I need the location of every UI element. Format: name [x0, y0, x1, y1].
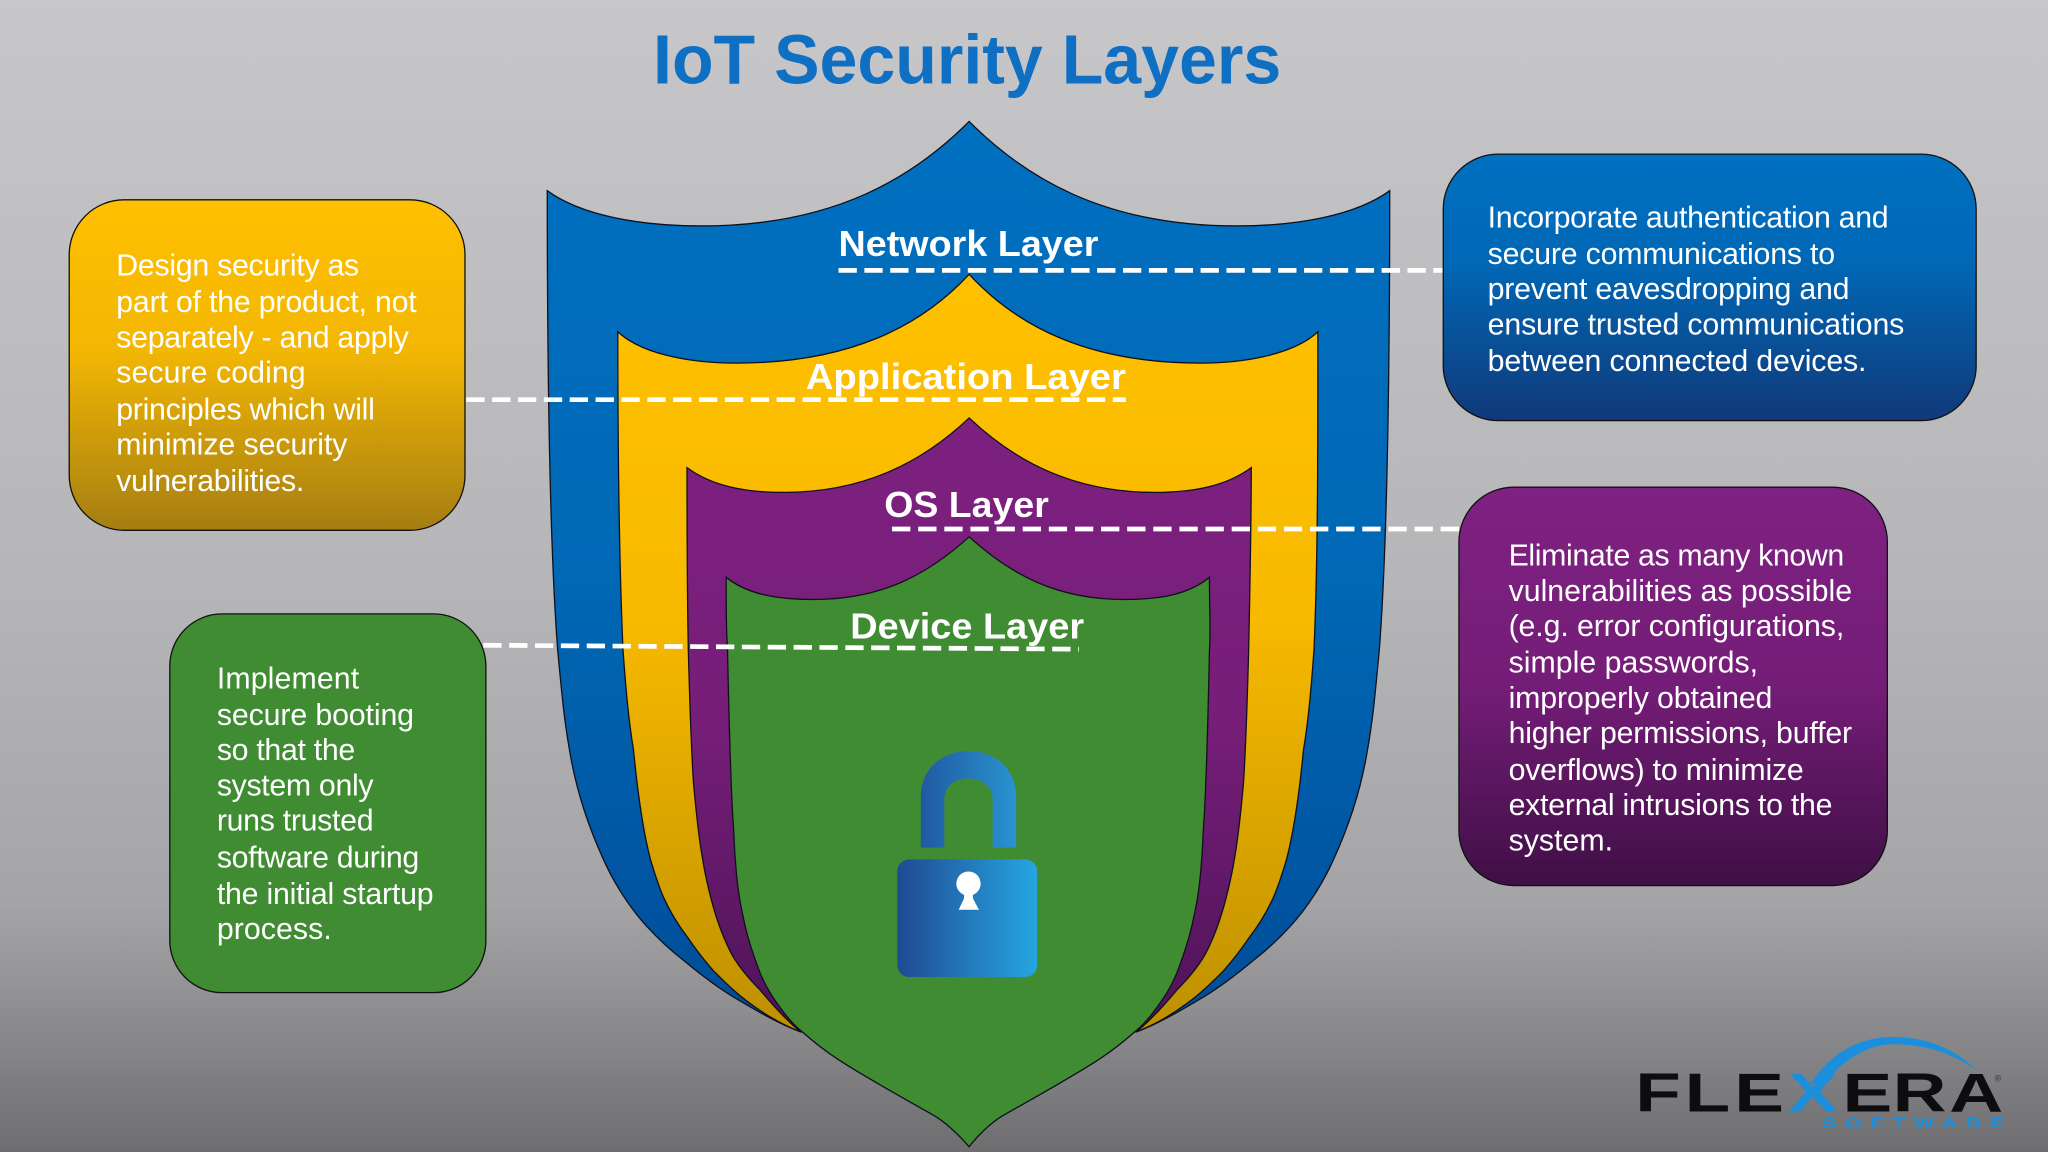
title: IoT Security Layers [653, 21, 1281, 99]
panel: application layer advice: part of the product, not [116, 286, 417, 319]
panel: application layer advice: vulnerabilities. [116, 465, 304, 498]
logo subtitle: SOFTWARE [1822, 1115, 2004, 1131]
panel: OS layer advice [1459, 487, 1887, 886]
icon: padlock [897, 751, 1037, 977]
panel: application layer advice: Design security as [116, 250, 359, 283]
shield: nested security layers [547, 121, 1390, 1147]
panel: OS layer advice: (e.g. error configurations, [1509, 610, 1844, 643]
panel: OS layer advice: Eliminate as many known [1509, 540, 1844, 573]
panel: OS layer advice: simple passwords, [1509, 647, 1758, 680]
logo arc [1810, 1037, 1976, 1084]
panel: device layer advice: Implement [217, 662, 360, 695]
panel: OS layer advice: improperly obtained [1509, 682, 1772, 715]
panel: network layer advice: ensure trusted communications [1488, 308, 1904, 341]
panel: device layer advice: process. [217, 913, 332, 946]
panel: device layer advice [170, 614, 486, 993]
panel: network layer advice: prevent eavesdropping and [1488, 273, 1849, 306]
panel: network layer advice: between connected devices. [1488, 345, 1866, 378]
panel: OS layer advice: system. [1509, 824, 1613, 857]
application layer shield [618, 274, 1318, 1032]
layer label: OS Layer: OS Layer [884, 484, 1049, 525]
panel: device layer advice: secure booting [217, 699, 414, 732]
OS layer shield [687, 418, 1251, 1032]
keyhole [956, 871, 981, 910]
padlock body [897, 859, 1037, 977]
panel: device layer advice: software during [217, 841, 419, 874]
device layer shield [726, 537, 1210, 1147]
connector: application layer to panel [466, 398, 1126, 401]
logo: Flexera Software [1635, 1037, 2004, 1131]
network layer shield [547, 121, 1390, 1032]
logo registered mark: ® [1994, 1073, 2001, 1083]
layer label: Network Layer: Network Layer [839, 223, 1098, 264]
layer label: Application Layer: Application Layer [806, 356, 1126, 397]
padlock shackle [921, 751, 1016, 848]
panel: OS layer advice: higher permissions, buffer [1509, 717, 1852, 750]
connector: OS layer to panel [892, 527, 1460, 531]
panel: application layer advice: secure coding [116, 357, 306, 390]
layer label: Device Layer: Device Layer [850, 606, 1084, 647]
panel: application layer advice: separately - and apply [116, 321, 410, 354]
panel: device layer advice: runs trusted [217, 805, 374, 838]
logo wordmark: FLEXERA [1635, 1062, 2003, 1123]
panel: application layer advice [69, 200, 465, 530]
panel: OS layer advice: vulnerabilities as possible [1509, 575, 1852, 608]
panel: device layer advice: so that the [217, 734, 355, 767]
panel: OS layer advice: overflows) to minimize [1509, 754, 1804, 787]
connector: device layer to panel [483, 645, 1079, 649]
connector: network layer to panel [839, 269, 1443, 272]
panel: network layer advice: secure communications to [1488, 238, 1835, 271]
panel: device layer advice: the initial startup [217, 878, 434, 911]
panel: application layer advice: minimize security [116, 429, 348, 462]
panel: device layer advice: system only [217, 769, 374, 802]
panel: OS layer advice: external intrusions to the [1509, 789, 1832, 822]
panel: network layer advice [1443, 154, 1976, 421]
panel: application layer advice: principles which will [116, 393, 375, 426]
panel: network layer advice: Incorporate authentication and [1488, 201, 1889, 234]
